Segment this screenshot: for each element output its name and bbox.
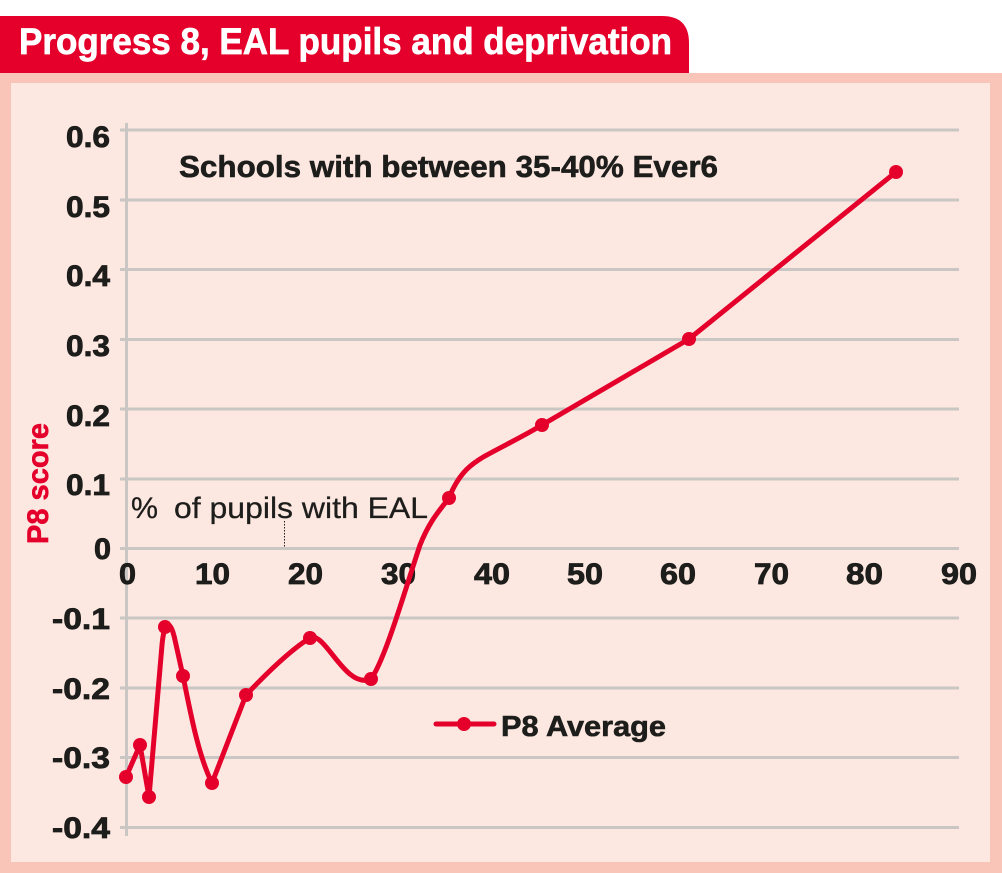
x axis labels	[119, 558, 977, 591]
legend	[436, 711, 666, 743]
y axis labels: 0.3	[66, 330, 110, 363]
leader line	[284, 521, 286, 547]
x axis labels: 90	[941, 558, 977, 591]
y axis labels	[52, 121, 111, 845]
x axis labels: 20	[288, 558, 323, 591]
chart subtitle: Schools with between 35-40% Ever6	[179, 149, 718, 184]
y axis labels: 0.6	[66, 121, 110, 154]
y axis labels: -0.3	[52, 742, 110, 775]
title banner: Progress 8, EAL pupils and deprivation	[19, 21, 672, 62]
y axis labels: 0.2	[66, 400, 110, 433]
y axis labels: -0.2	[52, 673, 110, 706]
line series: P8 average	[119, 165, 903, 804]
x axis labels: 0	[119, 558, 136, 591]
y axis labels: 0	[94, 533, 111, 566]
x axis labels: 60	[660, 558, 696, 591]
y axis title: P8 score	[22, 423, 55, 544]
y axis labels: 0.1	[66, 469, 110, 502]
x axis labels: 30	[381, 558, 416, 591]
y axis labels: -0.1	[52, 603, 110, 636]
y axis labels: 0.4	[66, 260, 110, 293]
y axis labels: -0.4	[52, 812, 110, 845]
x axis labels: 50	[567, 558, 603, 591]
x axis labels: 70	[754, 558, 789, 591]
legend: P8 Average	[501, 711, 666, 743]
x axis labels: 40	[474, 558, 510, 591]
x axis title: %	[131, 492, 158, 525]
x axis title: of pupils with EAL	[174, 492, 428, 525]
title banner	[0, 16, 689, 73]
x axis labels: 10	[195, 558, 230, 591]
x axis labels: 80	[846, 558, 883, 591]
y axis labels: 0.5	[66, 191, 110, 224]
